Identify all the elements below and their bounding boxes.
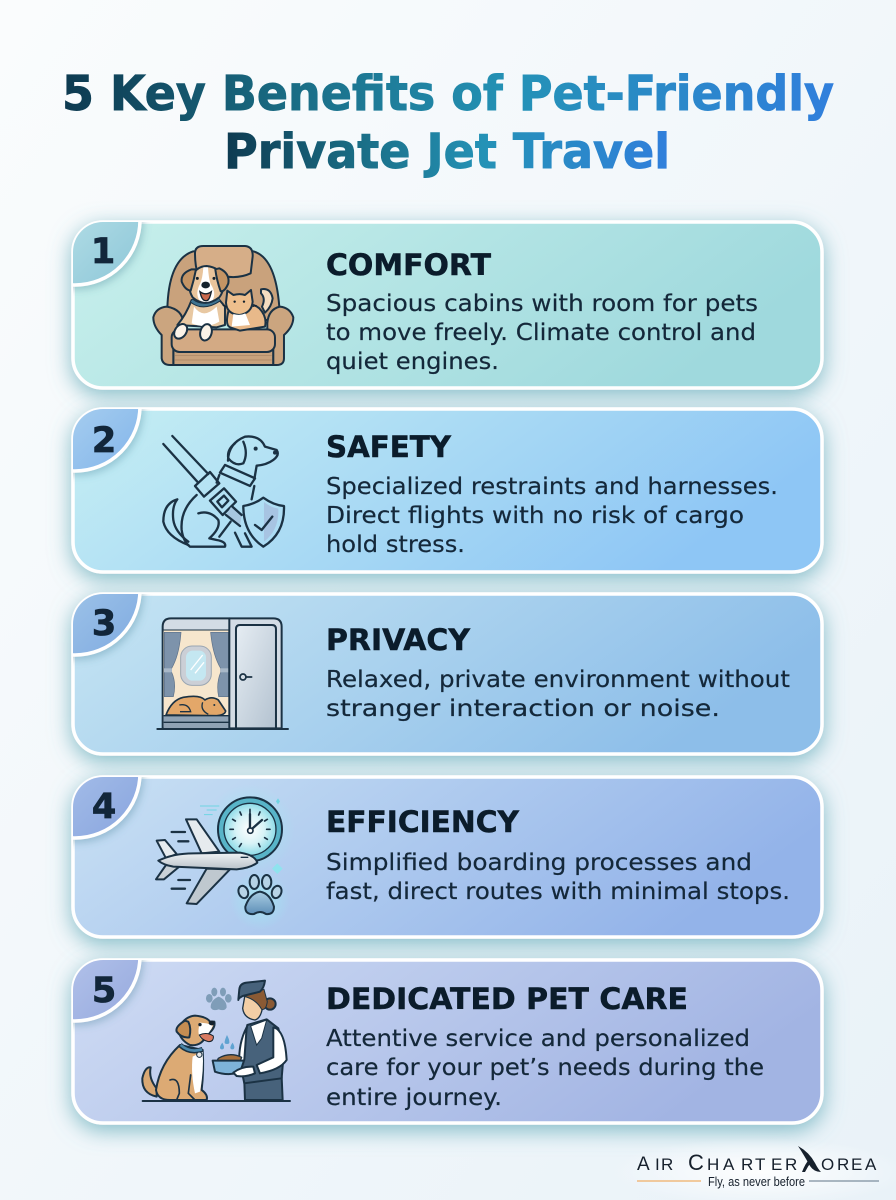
description: safety: hold stress. — [326, 530, 465, 558]
logo: Air Charter Korea: O — [821, 1155, 834, 1174]
panel: dedicated pet care — [56, 951, 839, 1146]
logo: Air Charter Korea: R — [785, 1155, 797, 1174]
logo: Air Charter Korea: E — [771, 1155, 782, 1174]
logo: Air Charter Korea: A — [637, 1154, 650, 1175]
description: dedicated pet care: entire journey. — [326, 1083, 502, 1111]
logo: Air Charter Korea: H — [707, 1155, 719, 1174]
panel: privacy — [56, 585, 839, 775]
description: comfort — [326, 289, 758, 375]
description: safety: Specialized restraints and harnesses. — [326, 472, 778, 500]
number badge 2: 2 — [92, 421, 116, 461]
heading: dedicated pet care: DEDICATED PET CARE — [326, 982, 688, 1016]
number badge 2 — [73, 409, 148, 480]
logo: Air Charter Korea: R — [837, 1155, 849, 1174]
description: comfort: to move freely. Climate control and — [326, 318, 756, 346]
logo: Air Charter Korea — [610, 1138, 896, 1200]
logo: Air Charter Korea: A — [865, 1155, 877, 1174]
icon: plane, clock and paw — [156, 784, 295, 930]
logo: Air Charter Korea: I — [655, 1155, 660, 1174]
heading: comfort: COMFORT — [326, 248, 491, 282]
logo: Air Charter Korea: Fly, as never before — [708, 1175, 805, 1189]
description: safety — [326, 472, 778, 558]
description: privacy — [326, 665, 790, 722]
number badge 1: 1 — [91, 232, 115, 272]
number badge 5: 5 — [92, 971, 116, 1011]
title: Private Jet Travel — [224, 124, 670, 180]
description: privacy: Relaxed, private environment without — [326, 665, 790, 693]
icon: attendant feeding dog — [142, 981, 290, 1101]
panel: safety — [56, 400, 839, 592]
number badge 3 — [73, 594, 148, 664]
heading: safety: SAFETY — [326, 430, 452, 464]
panel: comfort — [56, 211, 839, 408]
title: 5 Key Benefits of Pet-Friendly — [62, 66, 834, 122]
heading: privacy: PRIVACY — [326, 623, 471, 657]
logo: Air Charter Korea: E — [851, 1155, 862, 1174]
logo: Air Charter Korea: C — [688, 1150, 704, 1175]
description: comfort: quiet engines. — [326, 347, 499, 375]
description: dedicated pet care: care for your pet’s needs during the — [326, 1053, 764, 1081]
icon: harnessed dog with shield — [163, 436, 284, 547]
icon: dog and cat on armchair — [153, 246, 293, 365]
number badge 1 — [73, 222, 148, 294]
description: efficiency: Simplified boarding processes and — [326, 848, 752, 876]
title — [62, 66, 834, 180]
heading: efficiency: EFFICIENCY — [326, 805, 520, 839]
panel: efficiency — [56, 768, 839, 958]
logo: Air Charter Korea: T — [755, 1155, 765, 1174]
description: efficiency: fast, direct routes with minimal stops. — [326, 877, 790, 905]
logo: Air Charter Korea: R — [661, 1155, 673, 1174]
description: efficiency — [326, 848, 790, 905]
description: safety: Direct flights with no risk of cargo — [326, 501, 744, 529]
number badge 3: 3 — [92, 604, 116, 644]
number badge 5 — [73, 960, 148, 1030]
logo: Air Charter Korea: R — [741, 1155, 753, 1174]
description: comfort: Spacious cabins with room for pets — [326, 289, 758, 317]
number badge 4: 4 — [92, 787, 116, 827]
description: dedicated pet care: Attentive service and personalized — [326, 1024, 750, 1052]
description: dedicated pet care — [326, 1024, 764, 1111]
number badge 4 — [73, 777, 148, 846]
icon: private cabin with door and sleeping dog — [157, 618, 288, 729]
logo: Air Charter Korea: A — [723, 1155, 735, 1174]
description: privacy: stranger interaction or noise. — [326, 694, 720, 722]
